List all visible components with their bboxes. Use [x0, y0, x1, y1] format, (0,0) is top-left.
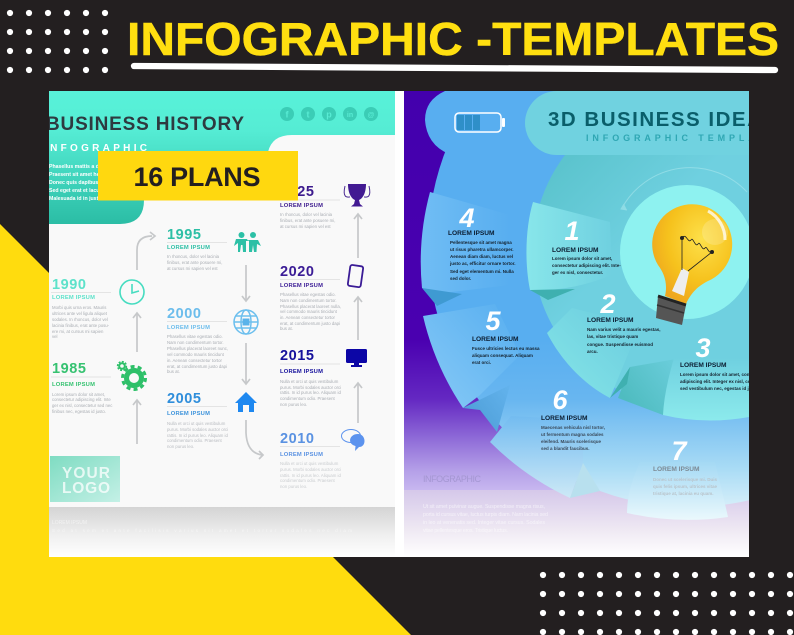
- petal: 4: [420, 192, 480, 292]
- heading: 3D BUSINESS IDEA: [548, 108, 763, 131]
- entry: 2015: Nulla et orci ut quis vestibulum: [280, 379, 339, 384]
- item: 7: LOREM IPSUM: [653, 466, 700, 473]
- icon: clock: [120, 280, 144, 304]
- badge: 16 plans: 16 PLANS: [134, 162, 260, 192]
- entry: 1985: Lorem ipsum dolor sit amet,: [52, 392, 105, 397]
- entry: 2020: vel commodo mauris tincidunt: [280, 309, 338, 314]
- petal: 1: [526, 202, 612, 290]
- footer text: porta id cursus vitae, luctus turpis diam. Nam lacinia sed: [423, 512, 548, 518]
- entry: 1985: ger ex nisl, consectetur sed nec: [52, 403, 113, 408]
- entry: 2000: 2000: [167, 306, 201, 322]
- item: 1: 1: [564, 216, 580, 246]
- petal: 2 fold: [610, 367, 630, 398]
- dot grid: bottom right: [533, 565, 794, 635]
- white gap between panels: [395, 91, 404, 557]
- entry: 1990: lacinia finibus, erat ante posu-: [52, 323, 110, 328]
- item: 4: sed dolor.: [450, 276, 471, 281]
- footer heading: INFOGRAPHIC: [423, 474, 482, 484]
- item: 2: [587, 289, 661, 354]
- entry: 1990: ere mi, at cursus mi sapien: [52, 329, 104, 334]
- entry: 2020: in. Aenean consectetur tortor: [280, 315, 336, 320]
- item: 2: congue. Suspendisse euismod: [587, 342, 653, 347]
- entry: 2005: rattis. In id purus leo. Aliquam id: [167, 433, 229, 438]
- entry: 2005: condimentum odio. Praesent: [167, 438, 223, 443]
- petal: 6 fold: [570, 463, 600, 498]
- item: 4: Aenean diam diam, luctus vel: [450, 254, 513, 259]
- item: 6: 6: [552, 385, 568, 415]
- big blue wheel: [433, 91, 749, 504]
- footer text: vitae pellentesque eros. Tristique luctus.: [423, 528, 508, 534]
- logo placeholder: YOUR: [62, 465, 110, 482]
- icon: house: [235, 392, 257, 412]
- entry: 1995: [167, 227, 227, 271]
- badge: 16 plans: [98, 151, 298, 200]
- panel background: [49, 135, 395, 507]
- item: 3: adipiscing elit. Integer ex nisl, consectetur: [680, 379, 771, 384]
- entry: 2020: Phasellus vitae egestas odio.: [280, 292, 336, 297]
- title: INFOGRAPHIC -TEMPLATES: [127, 13, 779, 65]
- entry: 2005: purus. Morbi sodales auctor orci: [167, 427, 228, 432]
- entry: 2010: LOREM IPSUM: [280, 452, 323, 458]
- item: 3: [680, 333, 771, 391]
- entry: 1995: finibus, erat ante posuere mi,: [167, 260, 222, 265]
- entry: 2000: erat, at condimentum justo dapi: [167, 364, 227, 369]
- panel: business history: [44, 91, 395, 557]
- header intro text: Malesuada id in justo: [49, 196, 101, 202]
- entry: 2025: finibus, erat ante posuere mi,: [280, 218, 335, 223]
- entry: 2025: [280, 184, 340, 229]
- item: 5: erat orci.: [472, 360, 491, 365]
- entry: 2010: Nulla et orci ut quis vestibulum: [280, 461, 339, 466]
- item: 2: 2: [599, 289, 616, 319]
- entry: 2010: non purus leo.: [280, 484, 307, 489]
- footer text: Ut sit amet pulvinar augue. Suspendisse magna risus,: [423, 504, 545, 510]
- item: 5: [472, 306, 540, 365]
- logo placeholder: [50, 456, 120, 502]
- entry: 2020: bus at.: [280, 326, 293, 331]
- shade under petal 3: [618, 358, 682, 415]
- entry: 2015: LOREM IPSUM: [280, 369, 323, 375]
- item: 6: ut fermentum magna sodales: [541, 432, 604, 437]
- icon: people: [234, 232, 261, 252]
- footer text: [423, 504, 548, 534]
- petal: 3: [663, 358, 749, 421]
- icon: speech bubbles: [342, 430, 365, 451]
- entry: 2000: Phasellus placerat laoreet nunc,: [167, 346, 228, 351]
- rotating arc arrow: [621, 168, 747, 210]
- petal: 1 fold: [530, 289, 575, 300]
- entry: 2005: Nulla et orci ut quis vestibulum: [167, 421, 226, 426]
- entry: 1985: consectetur adipiscing elit. Inte: [52, 397, 111, 402]
- petal: 5: [423, 304, 520, 408]
- entry: 1995: 1995: [167, 227, 201, 243]
- item: 4: [448, 203, 516, 281]
- entry: 2020: LOREM IPSUM: [280, 283, 323, 289]
- entry: 2000: bus at.: [167, 369, 180, 374]
- logo placeholder: LOGO: [62, 480, 110, 497]
- item: 6: eleifend. Mauris scelerisque: [541, 439, 602, 444]
- item: 3: 3: [695, 333, 711, 363]
- entry: 2010: 2010: [280, 431, 314, 447]
- entry: 1990: sodales. In rhoncus, dolor vel: [52, 317, 108, 322]
- item: 4: LOREM IPSUM: [448, 230, 495, 237]
- item: 3: LOREM IPSUM: [680, 362, 727, 369]
- icon: battery: [455, 113, 505, 132]
- item: 5: 5: [485, 306, 501, 336]
- panel content: [44, 91, 395, 557]
- item: 2: las, vitae tristique quam: [587, 334, 638, 339]
- icon: globe: [234, 310, 258, 334]
- item: 4: justo ac, efficitur ornare tortor.: [449, 261, 516, 266]
- item: 5: Fusce ultricies lectus eu massa: [472, 346, 540, 351]
- entry: 2010: [280, 431, 342, 489]
- header intro text: Sed eget erat et lacus: [49, 188, 102, 194]
- entry: 2005: LOREM IPSUM: [167, 411, 210, 417]
- entry: 2010: purus. Morbi sodales auctor orci: [280, 467, 341, 472]
- item: 7: 7: [671, 436, 688, 466]
- item: 4: Pellentesque sit amet magna: [450, 240, 512, 245]
- footer faded text: Sed at sem et ante facilisis varius sit amet et tortor sodales nec diam: [52, 528, 352, 533]
- entry: 2000: in. Aenean consectetur tortor: [167, 358, 223, 363]
- entry: 1985: finibus nec, egestas id justo.: [52, 409, 106, 414]
- header intro text: Praesent sit amet hendrerit: [49, 172, 116, 178]
- item: 1: ger ex nisl, consectetur.: [552, 270, 603, 275]
- entry: 1990: LOREM IPSUM: [52, 295, 95, 301]
- title pill: [525, 91, 749, 155]
- header intro text: Phasellus mattis a dolor: [49, 164, 109, 170]
- entry: 1985: [51, 361, 113, 414]
- subheading: INFOGRAPHIC TEMPLATE: [586, 133, 777, 143]
- entry: 2025: LOREM IPSUM: [280, 203, 323, 209]
- icon: light bulb: [652, 204, 732, 325]
- icon: tablet: [348, 265, 363, 287]
- item: 3: Lorem ipsum dolor sit amet, consectetur: [680, 372, 767, 377]
- entry: 2025: at cursus mi sapien vel est: [280, 224, 331, 229]
- item: 7: Donec ut scelerisque mi. Duis: [653, 477, 718, 482]
- item: 6: [541, 385, 605, 451]
- entry: 2000: vel commodo mauris tincidunt: [167, 352, 225, 357]
- petal: 6: [490, 416, 583, 498]
- petal: 5 fold: [463, 392, 506, 432]
- purple background: [404, 91, 576, 490]
- social icons: [280, 107, 378, 121]
- panel: 3D business idea: [404, 91, 749, 557]
- petal: 7: [627, 462, 728, 520]
- petal: 2: [547, 308, 640, 398]
- social icons: p: [326, 110, 332, 120]
- item: 6: Maecenas vehicula nisl tortor,: [541, 425, 605, 430]
- lower pale band: [404, 490, 749, 557]
- icon: trophy: [344, 184, 370, 206]
- item: 2: LOREM IPSUM: [587, 317, 634, 324]
- petal: 4 fold: [422, 288, 462, 306]
- panel content: [404, 91, 749, 557]
- entry: 1990: 1990: [52, 277, 86, 293]
- footer text: in leo at venenatis sed. Integer vitae cursus. Sodales: [423, 520, 545, 526]
- heading: BUSINESS HISTORY: [46, 114, 244, 135]
- entry: 2005: 2005: [167, 391, 201, 407]
- entry: 2000: Phasellus vitae egestas odio.: [167, 334, 223, 339]
- entry: 2005: [167, 391, 229, 449]
- footer faded text: [52, 520, 352, 533]
- social icons: in: [347, 112, 353, 119]
- item: 1: LOREM IPSUM: [552, 247, 599, 254]
- item: 7: tristique at, lacinia eu quam.: [653, 491, 714, 496]
- item: 4: ut risus pharetra ullamcorper.: [450, 247, 514, 252]
- item: 1: Lorem ipsum dolor sit amet,: [552, 256, 612, 261]
- item: 3: sed vestibulum nec, egestas id justo.: [680, 386, 760, 391]
- inner teal disc: [533, 93, 794, 407]
- entry: 1985: 1985: [52, 361, 86, 377]
- entry: 2015: non purus leo.: [280, 402, 307, 407]
- item: 4: 4: [458, 203, 475, 233]
- arrows: timeline: [133, 214, 362, 459]
- bottom grey band: [49, 507, 395, 537]
- battery pill: [425, 91, 478, 152]
- social icons: @: [368, 112, 375, 119]
- entry: 1995: In rhoncus, dolor vel lacinia: [167, 254, 220, 259]
- entry: 1985: LOREM IPSUM: [52, 382, 95, 388]
- dot grid: top left: [0, 3, 115, 80]
- entry: 2005: non purus leo.: [167, 444, 194, 449]
- entry: 2020: 2020: [280, 264, 314, 280]
- social icons: f: [286, 110, 290, 120]
- item: 7: quis felis ipsum, ultrices vitae: [653, 484, 718, 489]
- subheading: INFOGRAPHIC: [44, 143, 147, 154]
- item: 2: Nam varius velit a mauris egestas,: [587, 327, 661, 332]
- item: 4: Sed eget elementum mi. Nulla: [450, 269, 514, 274]
- bulb halo: [620, 185, 754, 319]
- entry: 1995: LOREM IPSUM: [167, 245, 210, 251]
- footer faded text: LOREM IPSUM: [52, 520, 87, 526]
- item: 5: aliquam consequat. Aliquam: [472, 353, 533, 358]
- icon: monitor: [346, 349, 367, 367]
- entry: 1990: vel: [52, 334, 58, 339]
- entry: 2015: rattis. In id purus leo. Aliquam id: [280, 390, 342, 395]
- item: 5: LOREM IPSUM: [472, 336, 519, 343]
- item: 6: sed a blandit faucibus.: [541, 446, 590, 451]
- social icons: t: [306, 110, 310, 120]
- item: 1: [552, 216, 621, 275]
- header intro text: [49, 164, 98, 201]
- entry: 1990: [51, 277, 111, 339]
- title underline: [134, 66, 775, 70]
- entry: 2025: 2025: [280, 184, 314, 200]
- entry: 2020: erat, at condimentum justo dapi: [280, 321, 340, 326]
- entry: 2015: 2015: [280, 348, 314, 364]
- entry: 2015: purus. Morbi sodales auctor orci: [280, 385, 341, 390]
- entry: 2000: [167, 306, 228, 374]
- entry: 1990: ultrices ante vel ligula aliquet: [52, 311, 108, 316]
- entry: 2020: Phasellus placerat laoreet nulla,: [280, 304, 341, 309]
- teal header: [49, 91, 395, 224]
- entry: 2020: [280, 264, 341, 331]
- entry: 2000: Nam non condimentum tortor.: [167, 340, 224, 345]
- item: 6: LOREM IPSUM: [541, 415, 588, 422]
- entry: 2025: In rhoncus, dolor vel lacinia: [280, 212, 333, 217]
- entry: 2020: Nam non condimentum tortor.: [280, 298, 337, 303]
- item: 1: consectetur adipiscing elit. Inte-: [552, 263, 621, 268]
- entry: 2010: condimentum odio. Praesent: [280, 478, 336, 483]
- item: 7: [653, 436, 718, 496]
- entry: 2015: [280, 348, 342, 407]
- entry: 1995: at cursus mi sapien vel est: [167, 266, 218, 271]
- icon: gears: [118, 362, 146, 390]
- item: 2: arcu.: [587, 349, 598, 354]
- entry: 1990: Morbi quis urna eros. Mauris: [52, 305, 106, 310]
- entry: 2000: LOREM IPSUM: [167, 325, 210, 331]
- entry: 2015: condimentum odio. Praesent: [280, 396, 336, 401]
- header intro text: Donec quis dapibus erat: [49, 180, 110, 186]
- entry: 2010: rattis. In id purus leo. Aliquam id: [280, 473, 342, 478]
- yellow corner triangle: [0, 224, 411, 635]
